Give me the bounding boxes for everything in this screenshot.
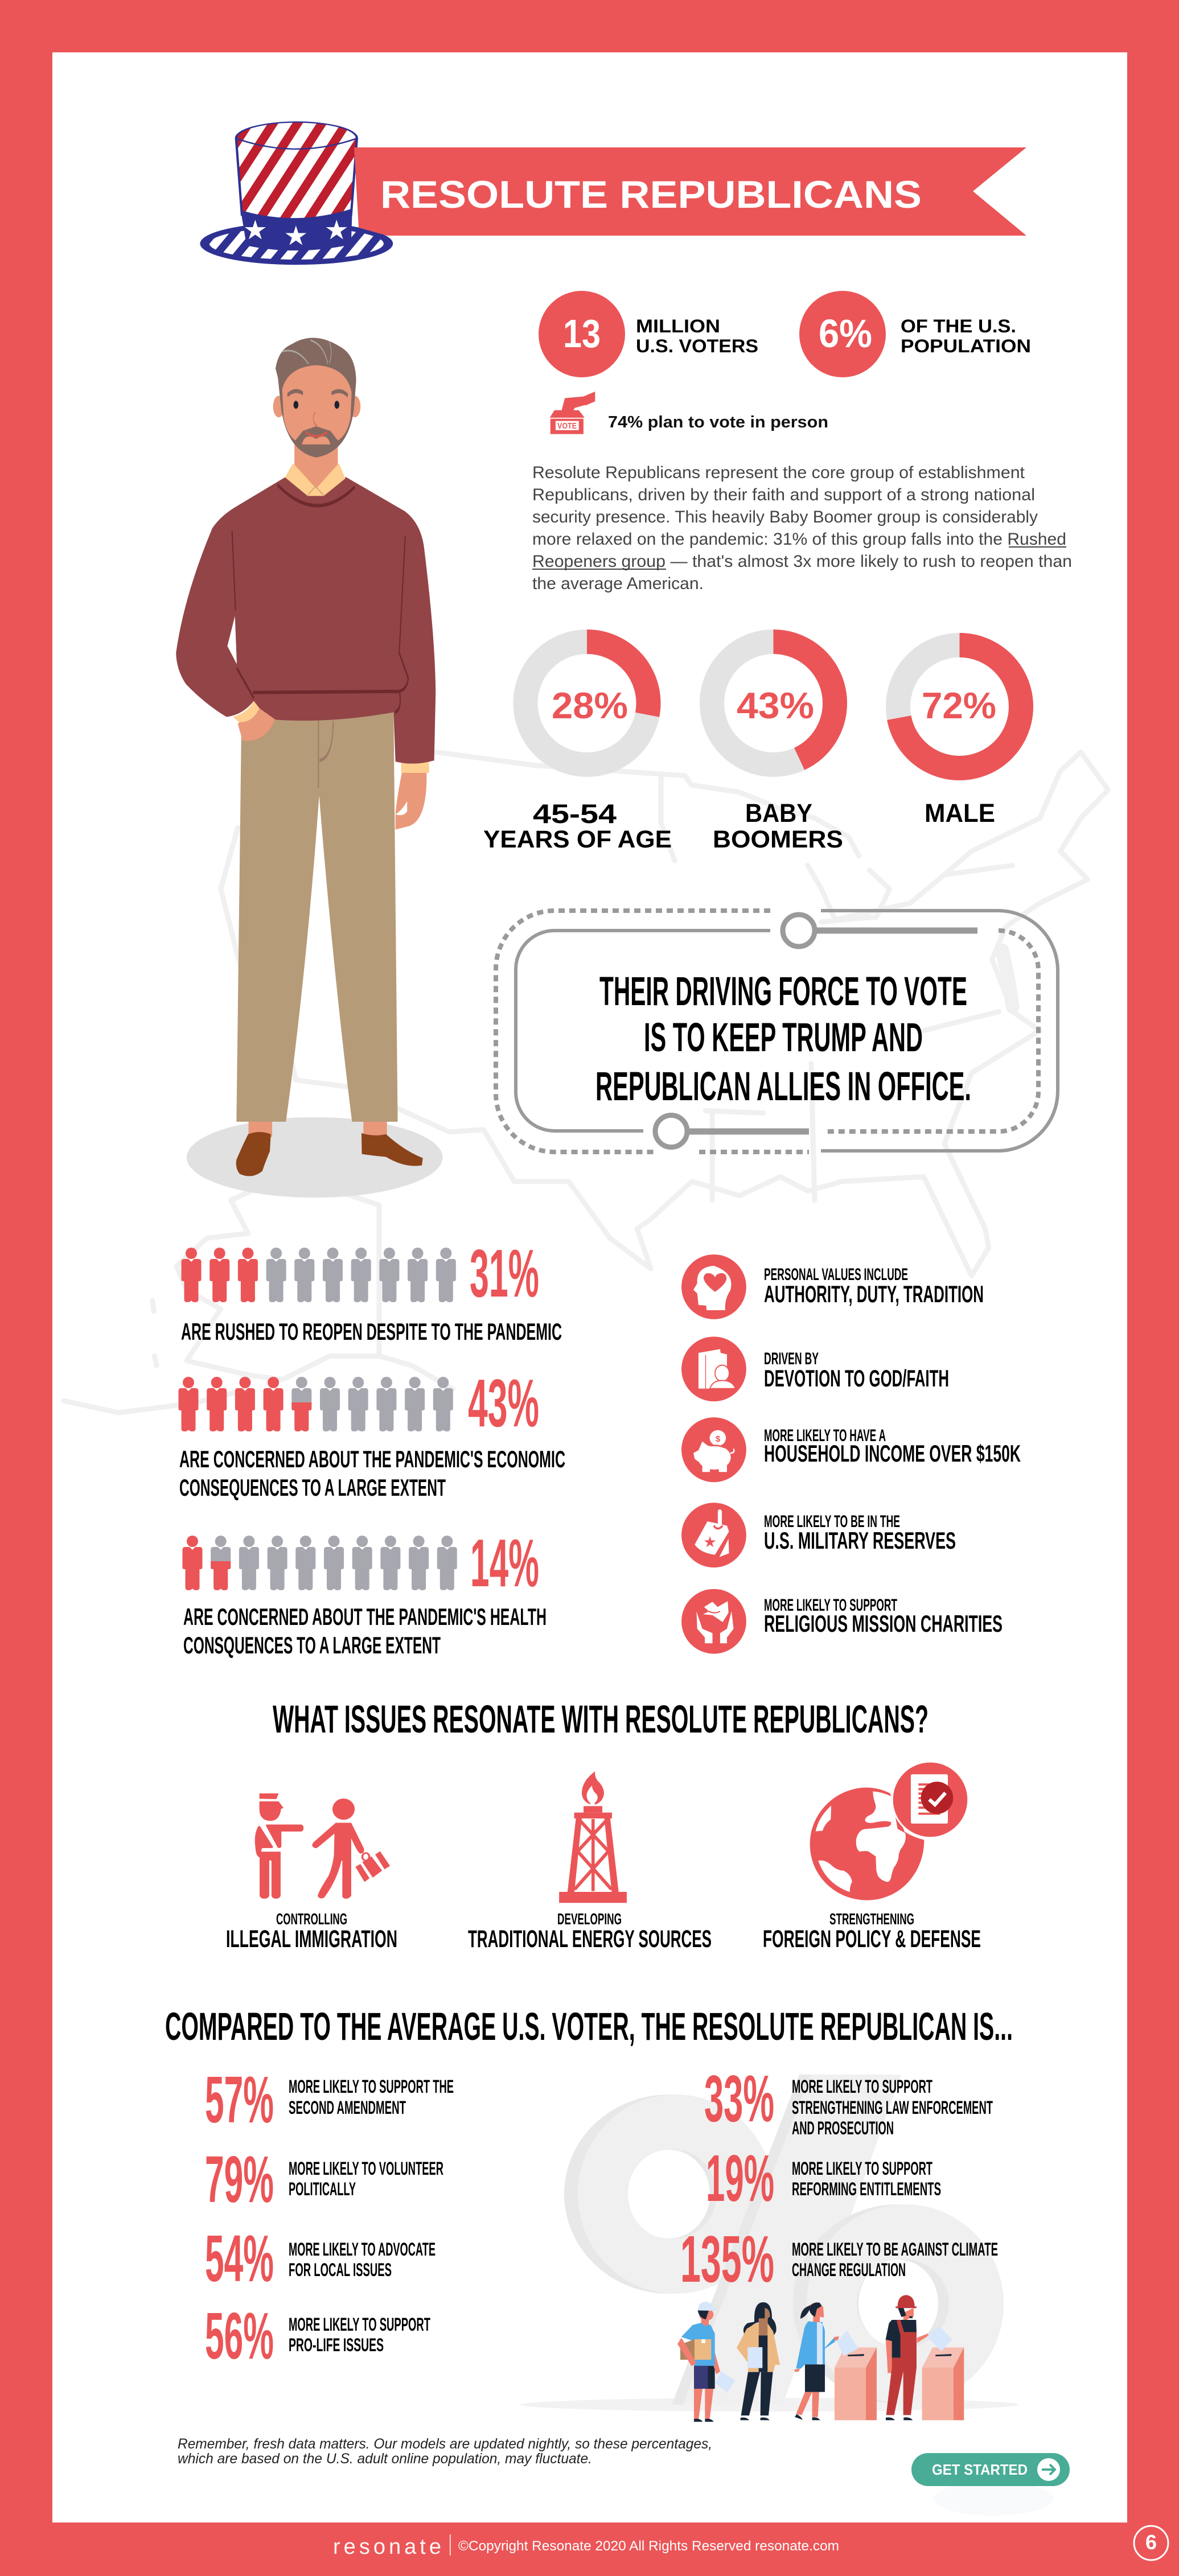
callout: driving force: IS TO KEEP TRUMP AND xyxy=(644,1015,923,1060)
trait: religious charities xyxy=(681,1589,1003,1654)
stat: 56% pro-life: 56% xyxy=(205,2299,274,2373)
trait: household income: HOUSEHOLD INCOME OVER $150K xyxy=(764,1440,1021,1467)
issue: foreign policy: FOREIGN POLICY & DEFENSE xyxy=(763,1925,981,1953)
donut: 43% baby boomers: BABY xyxy=(745,799,812,828)
icon: officer and traveller xyxy=(255,1793,390,1899)
stat: 135% climate regulation: CHANGE REGULATION xyxy=(792,2260,906,2280)
stat: 79% volunteer: POLITICALLY xyxy=(289,2179,356,2199)
pictogram row: 43%: CONSEQUENCES TO A LARGE EXTENT xyxy=(179,1474,446,1501)
icon: ballot box xyxy=(550,392,595,434)
issue: illegal immigration xyxy=(226,1793,397,1953)
hat icon xyxy=(200,122,393,265)
illustration: man in sweater xyxy=(176,338,443,1198)
stat: 56% pro-life xyxy=(205,2299,430,2373)
vote in person note: 74% plan to vote in person xyxy=(608,413,828,431)
trait: military reserves: U.S. MILITARY RESERVES xyxy=(764,1527,956,1554)
footnote xyxy=(178,2436,712,2467)
title banner xyxy=(354,147,1026,236)
stat: 56% pro-life: PRO-LIFE ISSUES xyxy=(289,2335,384,2355)
trait: religious charities: MORE LIKELY TO SUPPORT xyxy=(764,1596,897,1615)
donut: 72% male: MALE xyxy=(925,799,995,828)
description paragraph: Reopeners group — that's almost 3x more likely to rush to reopen than xyxy=(532,552,1072,571)
stat: 19% entitlements xyxy=(706,2141,941,2215)
stat: 135% climate regulation xyxy=(680,2222,998,2296)
footer: logo and copyright: ©Copyright Resonate 2020 All Rights Reserved resonate.com xyxy=(458,2538,839,2554)
stat: 19% entitlements: 19% xyxy=(706,2141,774,2215)
button: get started: GET STARTED xyxy=(932,2461,1028,2478)
icon: ballot box: VOTE xyxy=(557,421,577,431)
stat: 13 million voters: 13 xyxy=(563,311,601,356)
stat: 13 million voters: U.S. VOTERS xyxy=(636,336,758,356)
stat: 135% climate regulation: MORE LIKELY TO BE AGAINST CLIMATE xyxy=(792,2239,998,2260)
donut: 28% 45-54 years of age: 28% xyxy=(552,685,628,726)
pictogram row: 14%: 14% xyxy=(470,1525,539,1601)
stat: 57% second amendment xyxy=(205,2063,454,2137)
pictogram row: 43% xyxy=(179,1365,565,1501)
description paragraph: more relaxed on the pandemic: 31% of this group falls into the Rushed xyxy=(532,530,1066,549)
issue: illegal immigration: ILLEGAL IMMIGRATION xyxy=(226,1925,397,1953)
stat: 79% volunteer: 79% xyxy=(205,2142,274,2216)
trait: household income xyxy=(681,1417,1021,1482)
stat: 33% law enforcement: 33% xyxy=(704,2061,774,2135)
trait: personal values: AUTHORITY, DUTY, TRADITION xyxy=(764,1281,984,1307)
callout: driving force xyxy=(496,911,1058,1152)
pictogram row: 43%: ARE CONCERNED ABOUT THE PANDEMIC'S ECONOMIC xyxy=(179,1446,565,1472)
stat: 6% of population xyxy=(799,291,1031,377)
background map of the United States xyxy=(64,752,1108,1413)
issue: traditional energy xyxy=(468,1771,712,1953)
trait: household income: $ xyxy=(716,1434,721,1444)
pictogram row: 14% xyxy=(182,1525,547,1659)
stat: 19% entitlements: MORE LIKELY TO SUPPORT xyxy=(792,2158,932,2179)
issue: foreign policy xyxy=(763,1761,981,1953)
page number xyxy=(1134,2526,1168,2560)
issue: traditional energy: DEVELOPING xyxy=(557,1910,622,1928)
background percent sign xyxy=(520,2075,1019,2412)
donut: 28% 45-54 years of age: 45-54 xyxy=(533,799,617,829)
stat: 33% law enforcement: STRENGTHENING LAW ENFORCEMENT xyxy=(792,2097,993,2118)
donut: 43% baby boomers: BOOMERS xyxy=(713,826,843,853)
stat: 6% of population: POPULATION xyxy=(901,336,1031,356)
stat: 57% second amendment: MORE LIKELY TO SUPPORT THE xyxy=(289,2076,454,2097)
footnote: which are based on the U.S. adult online population, may fluctuate. xyxy=(178,2451,592,2467)
pictogram row: 31%: ARE RUSHED TO REOPEN DESPITE TO THE PANDEMIC xyxy=(181,1318,562,1345)
description paragraph xyxy=(532,463,1072,593)
donut: 72% male: 72% xyxy=(922,685,996,726)
pictogram row: 43%: 43% xyxy=(468,1365,539,1441)
stat: 57% second amendment: 57% xyxy=(205,2063,274,2137)
icon: oil derrick xyxy=(559,1771,627,1903)
stat: 33% law enforcement: AND PROSECUTION xyxy=(792,2118,894,2138)
pictogram row: 14%: CONSQUENCES TO A LARGE EXTENT xyxy=(183,1632,441,1659)
pictogram row: 31% xyxy=(181,1236,562,1345)
trait: religious charities: RELIGIOUS MISSION CHARITIES xyxy=(764,1610,1003,1637)
stat: 6% of population: 6% xyxy=(819,311,872,356)
trait: military reserves: MORE LIKELY TO BE IN THE xyxy=(764,1512,900,1531)
trait: military reserves xyxy=(681,1503,956,1567)
footer: logo and copyright: resonate xyxy=(333,2535,441,2559)
trait: household income: MORE LIKELY TO HAVE A xyxy=(764,1426,886,1445)
stat: 57% second amendment: SECOND AMENDMENT xyxy=(289,2097,406,2118)
stat: 13 million voters xyxy=(539,291,758,377)
stat: 33% law enforcement: MORE LIKELY TO SUPPORT xyxy=(792,2076,932,2097)
stat: 33% law enforcement xyxy=(704,2061,993,2138)
trait: devotion to faith xyxy=(681,1336,949,1401)
donut: 43% baby boomers xyxy=(712,642,843,853)
description paragraph: Resolute Republicans represent the core group of establishment xyxy=(532,463,1025,482)
stat: 19% entitlements: REFORMING ENTITLEMENTS xyxy=(792,2179,941,2199)
page number: 6 xyxy=(1145,2530,1157,2554)
footer: logo and copyright xyxy=(333,2534,839,2559)
stat: 79% volunteer: MORE LIKELY TO VOLUNTEER xyxy=(289,2158,443,2179)
issue: foreign policy: STRENGTHENING xyxy=(829,1910,914,1928)
icon: globe with document check xyxy=(810,1761,969,1900)
description paragraph: security presence. This heavily Baby Boomer group is considerably xyxy=(532,508,1038,526)
trait: personal values xyxy=(681,1254,984,1319)
illustration: voters at ballot boxes xyxy=(677,2295,964,2422)
footnote: Remember, fresh data matters. Our models are updated nightly, so these percentages, xyxy=(178,2436,712,2452)
issue: traditional energy: TRADITIONAL ENERGY SOURCES xyxy=(468,1925,712,1953)
stat: 6% of population: OF THE U.S. xyxy=(901,316,1016,336)
title banner: RESOLUTE REPUBLICANS xyxy=(380,173,922,216)
button: get started xyxy=(911,2453,1070,2516)
pictogram row: 31%: 31% xyxy=(470,1236,539,1311)
donut: 28% 45-54 years of age: YEARS OF AGE xyxy=(483,826,672,853)
stat: 135% climate regulation: 135% xyxy=(680,2222,774,2296)
stat: 54% local issues: FOR LOCAL ISSUES xyxy=(289,2260,392,2280)
pictogram row: 14%: ARE CONCERNED ABOUT THE PANDEMIC'S HEALTH xyxy=(183,1603,547,1630)
stat: 54% local issues xyxy=(205,2221,436,2295)
donut: 43% baby boomers: 43% xyxy=(737,685,814,726)
donut: 28% 45-54 years of age xyxy=(483,642,672,853)
stat: 13 million voters: MILLION xyxy=(636,316,720,336)
description paragraph: Republicans, driven by their faith and support of a strong national xyxy=(532,485,1035,504)
stat: 79% volunteer xyxy=(205,2142,443,2216)
stat: 54% local issues: MORE LIKELY TO ADVOCATE xyxy=(289,2239,436,2260)
trait: devotion to faith: DEVOTION TO GOD/FAITH xyxy=(764,1365,949,1392)
issue: illegal immigration: CONTROLLING xyxy=(276,1910,347,1928)
donut: 72% male xyxy=(898,645,1021,828)
trait: personal values: PERSONAL VALUES INCLUDE xyxy=(764,1265,908,1284)
trait: devotion to faith: DRIVEN BY xyxy=(764,1349,819,1368)
stat: 54% local issues: 54% xyxy=(205,2221,274,2295)
stat: 56% pro-life: MORE LIKELY TO SUPPORT xyxy=(289,2314,430,2335)
description paragraph: the average American. xyxy=(532,574,704,593)
